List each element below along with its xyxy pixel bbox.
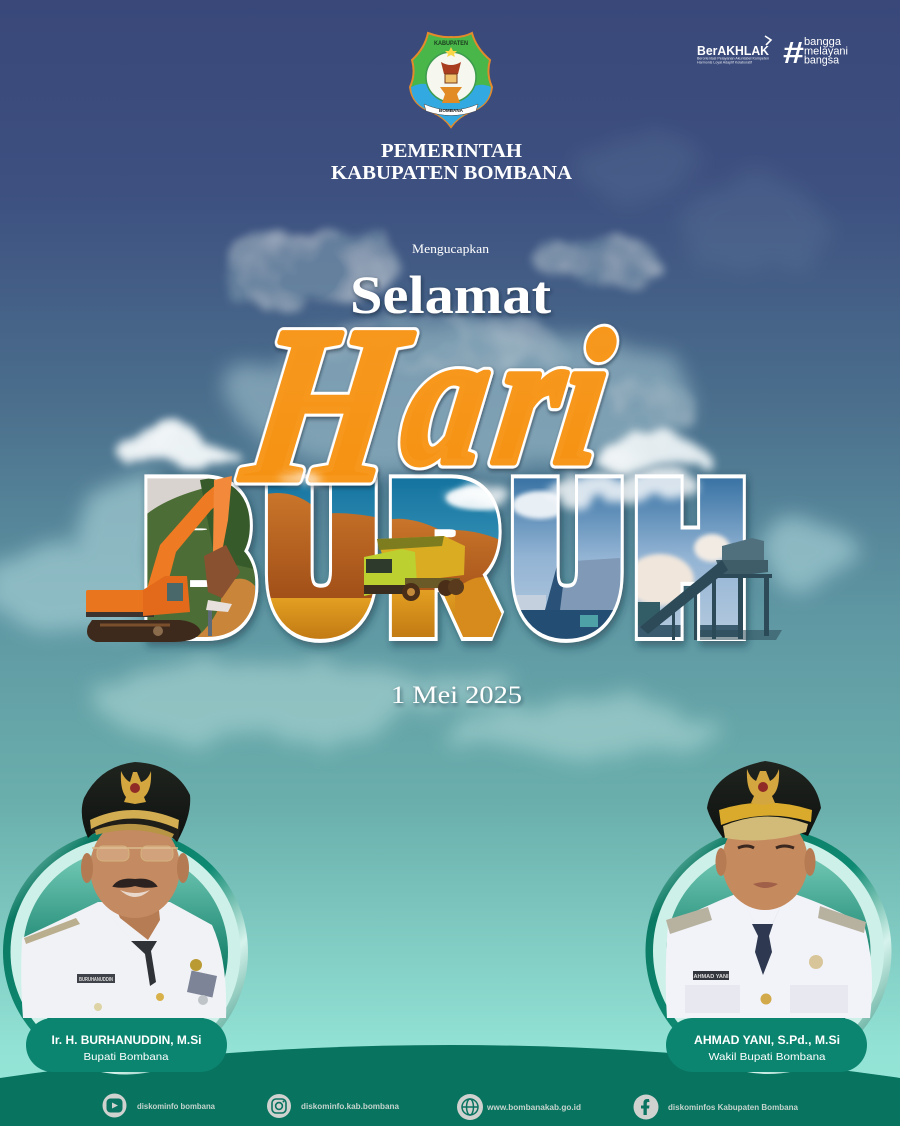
heading: Pemerintah Kabupaten Bombana: KABUPATEN BOMBANA	[331, 162, 572, 184]
icon: facebook	[634, 1094, 658, 1120]
icon: youtube	[102, 1094, 126, 1118]
face	[722, 814, 808, 910]
footer: Instagram: diskominfo.kab.bombana	[301, 1101, 399, 1111]
bangga melayani bangsa logo: #	[783, 35, 804, 70]
face	[90, 818, 180, 918]
clouds over lettering	[278, 469, 703, 505]
ring frame	[3, 830, 248, 1074]
name pill: Wakil Bupati: Wakil Bupati Bombana	[708, 1051, 826, 1063]
footer: YouTube: diskominfo bombana	[137, 1101, 215, 1111]
shirt collar	[742, 895, 786, 945]
footer: YouTube	[102, 1094, 215, 1118]
uniform	[666, 893, 872, 1018]
footer: website: www.bombanakab.go.id	[486, 1102, 581, 1112]
icon: globe	[457, 1094, 483, 1120]
date: 1 Mei 2025	[391, 682, 522, 709]
BerAKHLAK logo	[697, 36, 771, 64]
garuda badge	[121, 771, 151, 804]
BerAKHLAK logo: Berorientasi Pelayanan Akuntabel Kompeten	[697, 56, 769, 60]
title: Hari	[232, 281, 624, 527]
dump truck	[364, 536, 465, 601]
heading: Pemerintah Kabupaten Bombana: PEMERINTAH	[381, 140, 522, 162]
name pill: Bupati	[26, 1018, 227, 1072]
portrait: Wakil Bupati: AHMAD YANI	[693, 974, 729, 980]
cap	[707, 761, 821, 838]
text: Mengucapkan: Mengucapkan	[412, 242, 490, 256]
footer: Instagram	[267, 1094, 399, 1118]
title: Hari: H	[232, 281, 422, 527]
title: Hari: ari	[392, 294, 622, 504]
bangga melayani bangsa logo	[783, 35, 848, 70]
emblem: Kabupaten Bombana shield: BOMBANA	[439, 108, 464, 113]
heading: Pemerintah Kabupaten Bombana	[331, 140, 572, 184]
title: Selamat: Selamat	[350, 265, 551, 325]
title: Hari: H	[232, 281, 422, 527]
emblem: Kabupaten Bombana shield: KABUPATEN	[434, 41, 468, 47]
cap	[82, 762, 190, 842]
icon: instagram	[267, 1094, 291, 1118]
bangga melayani bangsa logo: bangsa	[804, 54, 840, 66]
portrait: Wakil Bupati	[646, 761, 892, 1074]
title: BURUH photo lettering	[142, 471, 752, 653]
footer: Facebook	[634, 1094, 798, 1120]
footer: Facebook: diskominfos Kabupaten Bombana	[668, 1102, 798, 1112]
name pill: Bupati: Bupati Bombana	[84, 1051, 169, 1063]
background clouds	[0, 135, 860, 764]
portrait: Bupati	[3, 762, 248, 1074]
bangga melayani bangsa logo: melayani	[804, 46, 848, 58]
bangga melayani bangsa logo: bangga	[804, 36, 842, 48]
ring frame	[646, 828, 892, 1074]
emblem: Kabupaten Bombana shield	[410, 33, 492, 127]
name pill: Bupati: Ir. H. BURHANUDDIN, M.Si	[52, 1033, 202, 1047]
portrait: Bupati: BURUHANUDDIN	[79, 977, 113, 983]
photo fill: quarry and factory	[147, 478, 743, 639]
neck	[113, 900, 160, 940]
name pill: Wakil Bupati	[666, 1018, 867, 1072]
letter outline: BURUH	[149, 453, 741, 663]
excavator	[86, 476, 240, 642]
conveyor plant	[640, 538, 782, 640]
BerAKHLAK logo: BerAKHLAK	[697, 44, 769, 58]
BerAKHLAK logo: Harmonis Loyal Adaptif Kolaboratif	[697, 60, 752, 64]
uniform	[21, 902, 226, 1018]
footer: website	[457, 1094, 581, 1120]
garuda badge	[747, 769, 779, 805]
name pill: Wakil Bupati: AHMAD YANI, S.Pd., M.Si	[694, 1033, 840, 1047]
footer band	[0, 1045, 900, 1126]
title: Hari: ari	[392, 294, 622, 504]
